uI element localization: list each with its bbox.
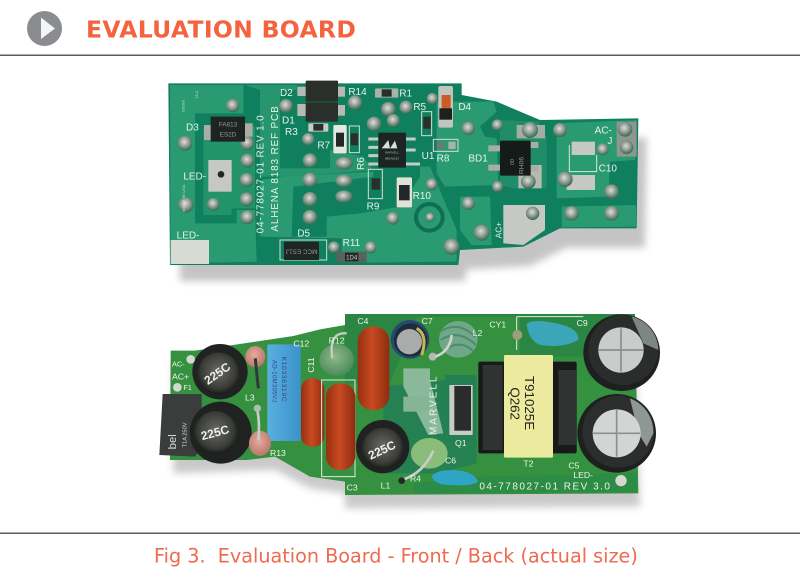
blue X capacitor C12: AD-10M305VJ: [271, 360, 277, 403]
board shadow: [177, 103, 647, 281]
caption: Fig 3. Evaluation Board - Front / Back (actual size): [154, 544, 638, 568]
bridge rectifier BD1: [488, 141, 538, 176]
silkscreen labels: R7: [317, 140, 331, 151]
diodes D1 and D2: [297, 81, 345, 122]
inductor coils 225C: [190, 344, 409, 473]
header: [27, 11, 356, 46]
transformer T2: T91025E: [522, 376, 537, 430]
blue X capacitor C12: K10336319C: [280, 357, 287, 402]
silkscreen labels: R14: [348, 87, 367, 98]
film capacitor red C11: [301, 378, 324, 447]
silver test pads: [171, 122, 637, 264]
bridge rectifier BD1: RH06: [518, 157, 525, 174]
silkscreen labels: BD1: [468, 154, 488, 165]
fuse block: bel: [167, 434, 179, 449]
transformer T2: [478, 355, 577, 458]
diode D3: ES2D: [220, 132, 237, 139]
ceramic capacitor CY1: [512, 317, 583, 350]
silkscreen labels: R12: [329, 335, 345, 345]
silkscreen labels: C9: [577, 318, 588, 328]
silkscreen labels: AC+: [172, 371, 189, 381]
silkscreen labels: R8: [437, 154, 450, 165]
silkscreen labels: R3: [285, 127, 298, 138]
electrolytic capacitor C9: [583, 314, 660, 391]
SMD resistors: 1D4: [346, 255, 358, 261]
silkscreen labels: LED-: [183, 171, 206, 182]
diode D5: [280, 240, 327, 260]
silkscreen labels: D3: [186, 123, 199, 134]
C10 outline: [569, 145, 597, 172]
silkscreen labels: L3: [245, 393, 255, 403]
silkscreen labels: AC-: [172, 360, 185, 369]
diode D5: MCC ES1J: [286, 247, 317, 254]
silkscreen labels: D5: [297, 229, 311, 240]
silkscreen labels: D1: [282, 115, 295, 126]
silkscreen labels: C12: [293, 339, 309, 349]
transistor Q1: [445, 375, 475, 442]
film capacitor red C4: [358, 327, 389, 410]
title: EVALUATION BOARD: [86, 16, 356, 44]
silkscreen labels: U1: [422, 151, 435, 162]
silkscreen labels: D4: [458, 102, 472, 113]
copper pour areas: [170, 85, 637, 263]
silkscreen labels: T2: [523, 459, 534, 469]
silkscreen labels: ALHENA 8183 REF PCB: [270, 105, 281, 232]
silkscreen labels: 13-2: [195, 91, 199, 98]
silkscreen labels: R9: [367, 201, 380, 212]
silkscreen labels: R13: [270, 448, 286, 458]
silkscreen labels: AC+: [494, 222, 504, 238]
top rule: [0, 54, 800, 56]
inductor coils 225C: 225C: [199, 422, 231, 443]
icon: play button: [27, 11, 62, 46]
silkscreen labels: R6: [356, 157, 367, 170]
Marvell logo area: MARVELL: [429, 375, 440, 435]
blue X capacitor C12: [267, 344, 301, 441]
silkscreen labels: C6: [445, 455, 456, 465]
silkscreen labels: C11: [306, 357, 316, 373]
silkscreen labels: F1: [183, 383, 192, 392]
silkscreen labels: 04-778027-01 REV 3.0: [479, 481, 611, 492]
silkscreen labels: [172, 316, 611, 493]
silkscreen labels: R10: [413, 191, 431, 202]
IC U1: MARVELL: [385, 150, 399, 154]
transformer T2: Q262: [508, 387, 523, 420]
silkscreen labels: R5: [413, 102, 427, 113]
fuse block: T1A 250V: [183, 422, 189, 447]
IC U1: 88EA8183: [385, 156, 399, 160]
silkscreen labels: LED-: [573, 470, 593, 480]
inductor coils 225C: 225C: [202, 359, 233, 388]
silkscreen labels: R1: [399, 89, 413, 100]
silkscreen labels: AC-: [595, 125, 612, 136]
film capacitor red C3: [322, 380, 355, 477]
PCB outline: [170, 314, 638, 495]
board shadow: [173, 328, 640, 508]
silkscreen labels: C10: [599, 164, 617, 175]
Marvell logo area: [403, 368, 443, 435]
silkscreen labels: L2: [473, 328, 482, 338]
pink resistors: [245, 346, 271, 456]
silkscreen labels: [177, 87, 617, 249]
diode D3: [204, 117, 253, 142]
ceramic capacitor C6: [432, 470, 478, 485]
silkscreen labels: C3: [347, 483, 358, 493]
mounting holes: [173, 355, 627, 486]
green resistors / beads: [319, 333, 448, 484]
fuse block: [159, 394, 202, 457]
silkscreen labels: CY1: [489, 320, 506, 330]
silkscreen labels: J: [607, 136, 612, 147]
silkscreen labels: LED-: [177, 230, 199, 241]
SMD resistors: [308, 88, 458, 262]
electrolytic capacitor C5: [577, 394, 656, 473]
silkscreen labels: R4: [410, 474, 421, 484]
bead inductor: [435, 321, 478, 358]
silkscreen labels: R11: [343, 238, 361, 249]
silkscreen labels: C7: [422, 316, 433, 326]
capacitor C7: [391, 320, 437, 361]
silkscreen labels: Q1: [455, 438, 467, 448]
silkscreen labels: L1: [381, 480, 390, 490]
panel: front of board (PCB solder side): [168, 81, 647, 281]
silkscreen labels: 04-778027-01 REV 1.0: [255, 115, 266, 233]
through-hole solder joints: [178, 93, 633, 255]
diode D3: FA813: [219, 122, 238, 129]
inductor coils 225C: 225C: [366, 438, 398, 463]
bottom rule: [0, 532, 800, 534]
bridge rectifier BD1: 00: [510, 159, 516, 165]
panel: back of board (component side): [159, 314, 660, 508]
silkscreen labels: D2: [280, 88, 293, 99]
silkscreen labels: C5: [568, 460, 580, 470]
silkscreen labels: MADE IN USA: [182, 184, 186, 212]
diode D4: [438, 86, 453, 128]
IC U1: [368, 133, 420, 168]
silkscreen labels: C4: [357, 316, 369, 326]
silkscreen labels: 88286: [181, 100, 185, 112]
PCB outline: [168, 83, 638, 265]
